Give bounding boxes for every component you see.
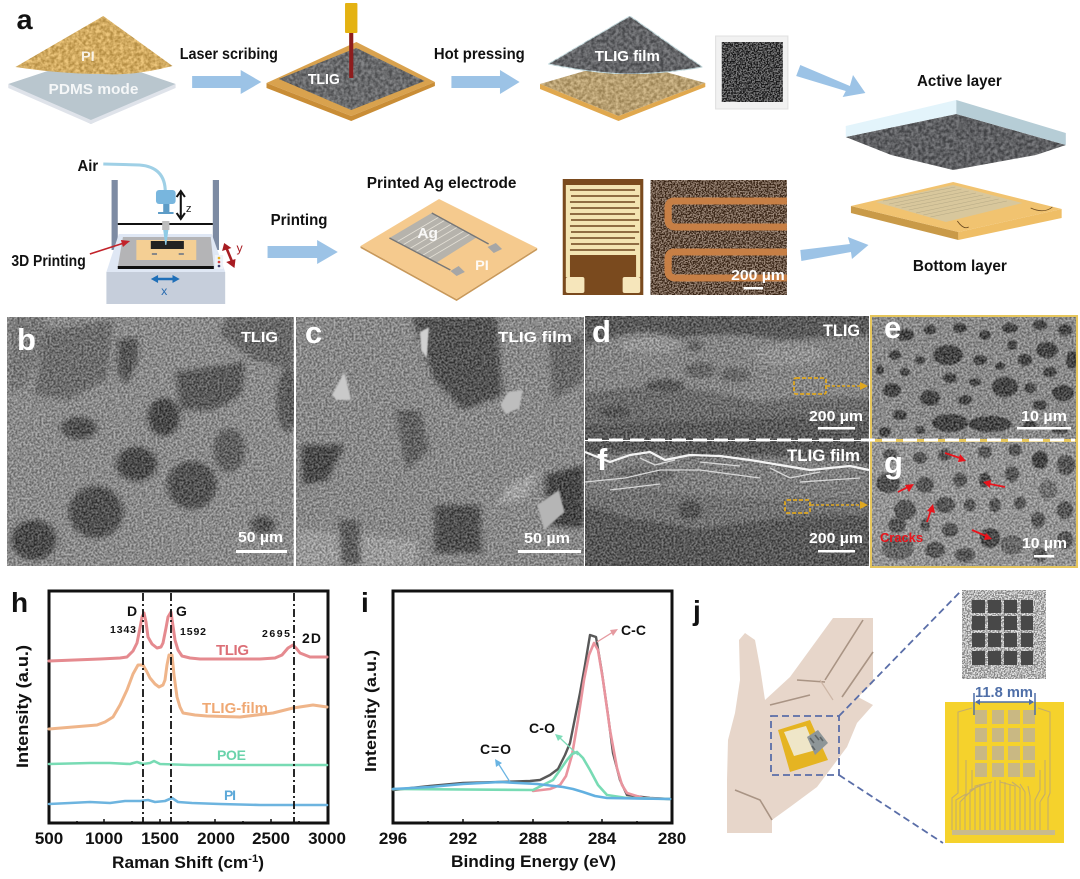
label j: j: [692, 595, 701, 626]
zoom box and arrow to e: [794, 378, 868, 394]
illustration: printed Ag electrode on PI: [361, 199, 537, 301]
panel d: cross-section TLIG: [585, 314, 869, 440]
series label TLIG: TLIG: [216, 642, 249, 659]
photo: electrode micrograph: 200 µm: [731, 267, 785, 284]
series label PI: PI: [224, 787, 236, 803]
illustration: 3D printer: x: [161, 284, 167, 298]
y axis title: Intensity (a.u.): [13, 645, 32, 768]
illustration: 3D printer: y: [237, 241, 244, 255]
x axis title: Binding Energy (eV): [451, 852, 616, 871]
x tick labels: 292: [449, 829, 477, 848]
peak annotations: C-C: [621, 622, 646, 638]
illustration: 3D printer: [90, 164, 244, 304]
panel g: high-magnification foam TLIG film with cracks: [871, 441, 1077, 567]
label b: b: [17, 322, 36, 357]
label c: c: [305, 315, 322, 350]
curve C-O: [393, 752, 670, 799]
illustration: TLIG film peeled from PI: [540, 16, 705, 121]
photo: TLIG film sample: [716, 36, 788, 109]
curve TLIG-film: [49, 655, 327, 729]
zoom box and leader lines: [771, 592, 960, 843]
scale bar 50 µm: [518, 530, 581, 553]
peak annotations: C-O: [529, 720, 555, 736]
illustration: printed Ag electrode on PI: Ag: [417, 225, 438, 242]
illustration: 3D printer: z: [186, 203, 192, 215]
series label TLIG-film: TLIG-film: [202, 700, 268, 717]
text: Laser scribing: Laser scribing: [180, 46, 278, 63]
curve POE: [49, 761, 327, 765]
x tick labels: 2000: [197, 829, 235, 848]
label f: f: [597, 442, 608, 477]
label i: i: [361, 587, 369, 618]
label d: d: [592, 314, 611, 349]
illustration: TLIG on PI with laser: TLIG: [308, 71, 340, 88]
label TLIG film: TLIG film: [787, 446, 860, 465]
scale bar 50 µm: 50 µm: [524, 530, 570, 547]
illustration: PI on PDMS mould: PI: [81, 49, 95, 65]
label a: a: [17, 4, 33, 36]
illustration: printed Ag electrode on PI: PI: [475, 258, 489, 274]
crack arrows and label: [880, 453, 1005, 545]
peak labels: 1343: [110, 624, 136, 636]
photo: printed comb electrode: [563, 179, 643, 295]
illustration: active layer: [846, 100, 1066, 170]
illustration: TLIG film peeled from PI: TLIG film: [595, 48, 660, 65]
label TLIG: TLIG: [823, 321, 860, 340]
panel h: Raman spectra: [11, 587, 346, 872]
label g: g: [884, 445, 903, 480]
arrow: hot pressing: [451, 70, 520, 94]
panel c: SEM TLIG film: [296, 315, 585, 566]
peak labels: 2695: [262, 628, 290, 640]
scale bar 10 µm: 10 µm: [1021, 408, 1067, 425]
illustration: PI on PDMS mould: PDMS mode: [49, 81, 138, 98]
label e: e: [884, 310, 901, 345]
scale bar 50 µm: [236, 529, 287, 553]
scale bar 10 µm: 10 µm: [1022, 535, 1067, 552]
x axis title: ): [258, 853, 264, 872]
arrow: towards active layer: [796, 65, 865, 97]
text: 3D Printing: 3D Printing: [11, 253, 86, 270]
label h: h: [11, 587, 28, 618]
left half of process steps: [8, 3, 537, 304]
peak annotations: C=O: [480, 741, 511, 757]
peak labels: 1592: [180, 626, 206, 638]
label TLIG: TLIG: [241, 329, 278, 346]
photo: 4x4 active layer array: [962, 590, 1046, 679]
crack arrows and label: Cracks: [880, 530, 923, 545]
zoom box and arrow to g: [785, 500, 868, 513]
photo: hand holding device: [727, 618, 873, 833]
right half of process steps: [540, 16, 1066, 295]
scale bar 50 µm: 50 µm: [238, 529, 283, 546]
peak labels: 2D: [302, 630, 321, 646]
peak labels: G: [176, 603, 187, 619]
arrow: printing: [268, 240, 338, 264]
panel j: device on hand: [692, 590, 1064, 843]
photo: electrode array on yellow PI: [945, 702, 1064, 843]
curve PI: [49, 798, 327, 805]
x tick labels: 280: [658, 829, 686, 848]
x tick labels: 284: [588, 829, 617, 848]
peak labels: D: [127, 603, 137, 619]
curve C=O: [393, 782, 670, 799]
x axis title: -1: [248, 853, 258, 865]
dimension: 11.8 mm: [974, 684, 1035, 715]
text: Printing: Printing: [271, 212, 327, 229]
panel b: SEM TLIG: [7, 317, 299, 566]
x tick labels: 1000: [85, 829, 123, 848]
text: Printed Ag electrode: Printed Ag electrode: [367, 175, 517, 192]
peak annotations: [480, 622, 646, 782]
scale bar 10 µm: [1017, 408, 1071, 430]
x tick labels: [35, 829, 346, 848]
curve raw data: [393, 635, 670, 799]
panel f: cross-section TLIG film: [585, 441, 869, 566]
scale bar 200 µm: 200 µm: [809, 408, 863, 425]
panel a: fabrication process: [8, 3, 1066, 304]
dimension: 11.8 mm: 11.8 mm: [975, 684, 1033, 701]
photo: electrode micrograph: [651, 180, 787, 295]
illustration: bottom layer: [851, 182, 1062, 240]
text: Hot pressing: Hot pressing: [434, 46, 525, 63]
illustration: PI on PDMS mould: [8, 16, 176, 124]
XPS chart: [363, 591, 686, 871]
scale bar 200 µm: 200 µm: [809, 530, 863, 547]
x tick labels: 3000: [308, 829, 346, 848]
panel e: high-magnification foam TLIG: [871, 310, 1078, 440]
text: Active layer: Active layer: [917, 73, 1002, 90]
peak labels: [110, 603, 321, 646]
x tick labels: 288: [519, 829, 547, 848]
Raman chart: [13, 591, 346, 872]
arrow: laser scribing: [192, 70, 261, 94]
arrow: towards bottom layer: [800, 237, 868, 261]
curve C-C: [533, 643, 670, 799]
label TLIG film: TLIG film: [498, 329, 572, 346]
x tick labels: [379, 829, 686, 848]
x tick labels: 1500: [141, 829, 179, 848]
x tick labels: 2500: [252, 829, 290, 848]
x tick labels: 296: [379, 829, 407, 848]
x axis title: Raman Shift (cm: [112, 853, 246, 872]
y axis title: Intensity (a.u.): [363, 650, 380, 772]
text: Bottom layer: Bottom layer: [913, 258, 1007, 275]
curve TLIG: [49, 612, 327, 661]
illustration: TLIG on PI with laser: [267, 3, 435, 121]
series label POE: POE: [217, 747, 246, 763]
x tick labels: 500: [35, 829, 63, 848]
panel i: XPS spectrum: [361, 587, 686, 871]
text: Air: Air: [77, 158, 98, 175]
